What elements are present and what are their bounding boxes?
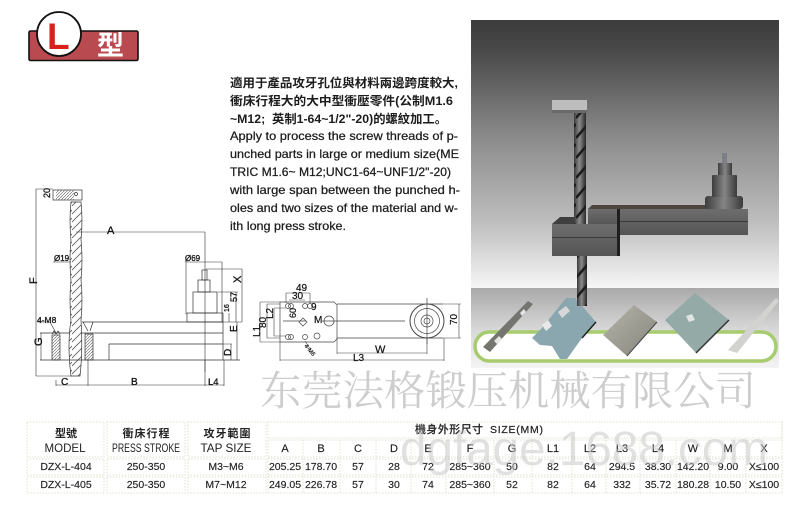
- header labels: 攻牙範圍: [204, 426, 250, 440]
- top view dimension labels: 9: [311, 302, 317, 313]
- row DZX-L-404: 57: [352, 461, 364, 473]
- watermark: website: dgfage.1688.com: [400, 423, 768, 476]
- row DZX-L-405: 52: [506, 479, 518, 491]
- product photo panel: [471, 20, 779, 368]
- column labels: W: [688, 443, 699, 455]
- top view dimension labels: 60: [288, 308, 298, 318]
- side view technical drawing: [36, 189, 242, 386]
- column labels: B: [317, 443, 325, 455]
- column labels: E: [424, 443, 432, 455]
- side view dimension labels: G: [33, 337, 45, 346]
- top view dimension labels: [252, 283, 460, 364]
- top view dimension labels: M: [314, 315, 322, 326]
- header labels: MODEL: [44, 443, 86, 455]
- top view technical drawing: [260, 293, 461, 361]
- column labels: X: [760, 443, 768, 455]
- row DZX-L-404: X≤100: [749, 461, 779, 473]
- header labels: PRESS STROKE: [112, 443, 180, 455]
- row DZX-L-404: 72: [422, 461, 434, 473]
- row DZX-L-404: 64: [584, 461, 596, 473]
- cylinder head: [187, 270, 223, 322]
- row DZX-L-405: 180.28: [677, 479, 709, 491]
- column labels: L3: [616, 443, 628, 455]
- row DZX-L-405: X≤100: [749, 479, 779, 491]
- top view dimension labels: 4-M6: [302, 343, 316, 358]
- description text block: oles and two sizes of the material and w-: [230, 201, 458, 215]
- table grid: [27, 422, 782, 493]
- top view dimension labels: 80: [258, 316, 269, 328]
- row DZX-L-405: 35.72: [645, 479, 671, 491]
- side view dimension labels: L4: [208, 377, 219, 388]
- mounting plate: [280, 302, 337, 342]
- row DZX-L-405: 285~360: [449, 479, 491, 491]
- row DZX-L-404: 9.00: [718, 461, 738, 473]
- side view dimension labels: B: [131, 377, 138, 388]
- lead screw: [69, 202, 82, 376]
- description text block: Apply to process the screw threads of p-: [230, 129, 458, 143]
- column labels: M: [723, 443, 733, 455]
- row DZX-L-405: 30: [388, 479, 400, 491]
- column labels: L1: [547, 443, 559, 455]
- description text block: unched parts in large or medium size(ME: [230, 147, 459, 161]
- description text block: ith long press stroke.: [230, 219, 346, 233]
- row DZX-L-405: 64: [584, 479, 596, 491]
- header labels: 衝床行程: [122, 426, 170, 440]
- column labels: G: [508, 443, 516, 455]
- side view dimension labels: [28, 188, 244, 388]
- sheet metal part 1: [483, 301, 533, 352]
- side view dimension labels: A: [107, 225, 115, 237]
- row DZX-L-404: [40, 461, 779, 473]
- top view dimension labels: 70: [449, 313, 460, 325]
- tapping arm: [552, 205, 748, 256]
- description text block: 適用于產品攻牙孔位與材料兩邊跨度較大,: [230, 75, 458, 90]
- row DZX-L-404: 50: [506, 461, 518, 473]
- column labels: D: [390, 443, 398, 455]
- header labels: SIZE(MM): [490, 424, 543, 436]
- column labels: C: [354, 443, 362, 455]
- row DZX-L-404: 142.20: [677, 461, 709, 473]
- top view dimension lines: [260, 293, 461, 361]
- column labels: A: [281, 443, 289, 455]
- header labels: 型號: [55, 426, 77, 440]
- side view dimension labels: 4-M8: [37, 315, 57, 325]
- model data table: [27, 422, 782, 493]
- row DZX-L-404: 250-350: [127, 461, 165, 473]
- top view dimension labels: L3: [353, 353, 365, 364]
- top view dimension labels: W: [375, 344, 386, 356]
- header labels: 機身外形尺寸: [415, 422, 483, 436]
- logo: L type badge: 型: [97, 31, 124, 61]
- sheet metal part 4: [665, 293, 729, 353]
- arm and round head: [322, 298, 444, 344]
- row DZX-L-404: 38.30: [645, 461, 671, 473]
- row DZX-L-405: 57: [352, 479, 364, 491]
- row DZX-L-405: 226.78: [305, 479, 337, 491]
- sheet metal part 3: [603, 305, 657, 356]
- row DZX-L-404: 178.70: [305, 461, 337, 473]
- body block outlines: [40, 322, 240, 360]
- column labels: L4: [652, 443, 664, 455]
- description text block: 衝床行程大的大中型衝壓零件(公制M1.6: [230, 93, 453, 108]
- top view dimension labels: 30: [292, 291, 304, 302]
- description text block: TRIC M1.6~ M12;UNC1-64~UNF1/2"-20): [230, 165, 451, 179]
- side view dimension labels: 57: [229, 292, 239, 302]
- side view dimension labels: 16: [224, 304, 231, 312]
- header labels: [44, 422, 543, 455]
- side view dimension labels: C: [61, 377, 68, 388]
- dimension lines: [36, 189, 242, 386]
- side view dimension labels: Ø69: [185, 254, 201, 263]
- column labels: L2: [584, 443, 596, 455]
- row DZX-L-405: M7~M12: [205, 479, 247, 491]
- top view dimension labels: L2: [265, 307, 276, 319]
- row DZX-L-404: 285~360: [449, 461, 491, 473]
- row DZX-L-405: 332: [613, 479, 631, 491]
- description text block: with large span between the punched h-: [229, 183, 460, 197]
- sheet metal part 5: [728, 298, 779, 353]
- logo: L type badge: [29, 12, 138, 61]
- row DZX-L-404: 205.25: [269, 461, 301, 473]
- tap head block: [53, 190, 82, 200]
- side view dimension labels: D: [223, 349, 234, 356]
- top holder block: [552, 100, 587, 113]
- row DZX-L-404: 28: [388, 461, 400, 473]
- green ring: [475, 332, 776, 361]
- row DZX-L-405: 74: [422, 479, 434, 491]
- column labels: [281, 443, 768, 455]
- sheet metal part 2: [532, 298, 596, 359]
- row DZX-L-405: DZX-L-405: [40, 479, 92, 491]
- row DZX-L-404: M3~M6: [208, 461, 244, 473]
- side view dimension labels: F: [28, 277, 40, 284]
- lead screw: [574, 112, 587, 306]
- description text block: ~M12; 英制1-64~1/2"-20)的螺紋加工。: [230, 111, 447, 126]
- description text block: [229, 75, 460, 233]
- row DZX-L-404: 294.5: [609, 461, 635, 473]
- column labels: F: [467, 443, 474, 455]
- row DZX-L-405: 249.05: [269, 479, 301, 491]
- side view dimension labels: 20: [42, 188, 52, 198]
- row DZX-L-404: 82: [547, 461, 559, 473]
- row DZX-L-405: 82: [547, 479, 559, 491]
- row DZX-L-405: 250-350: [127, 479, 165, 491]
- side view dimension labels: E: [229, 325, 240, 332]
- top view dimension labels: L1: [252, 325, 263, 337]
- header labels: TAP SIZE: [200, 443, 252, 455]
- side view dimension labels: X: [232, 275, 244, 283]
- row DZX-L-405: 10.50: [715, 479, 741, 491]
- logo: L type badge: L: [47, 16, 70, 57]
- cylinder head: [705, 153, 743, 209]
- top view dimension labels: 49: [296, 283, 308, 294]
- watermark: company name: 东莞法格锻压机械有限公司: [260, 368, 756, 414]
- row DZX-L-404: DZX-L-404: [40, 461, 92, 473]
- side view dimension labels: Ø19: [54, 254, 70, 263]
- row DZX-L-405: [40, 479, 779, 491]
